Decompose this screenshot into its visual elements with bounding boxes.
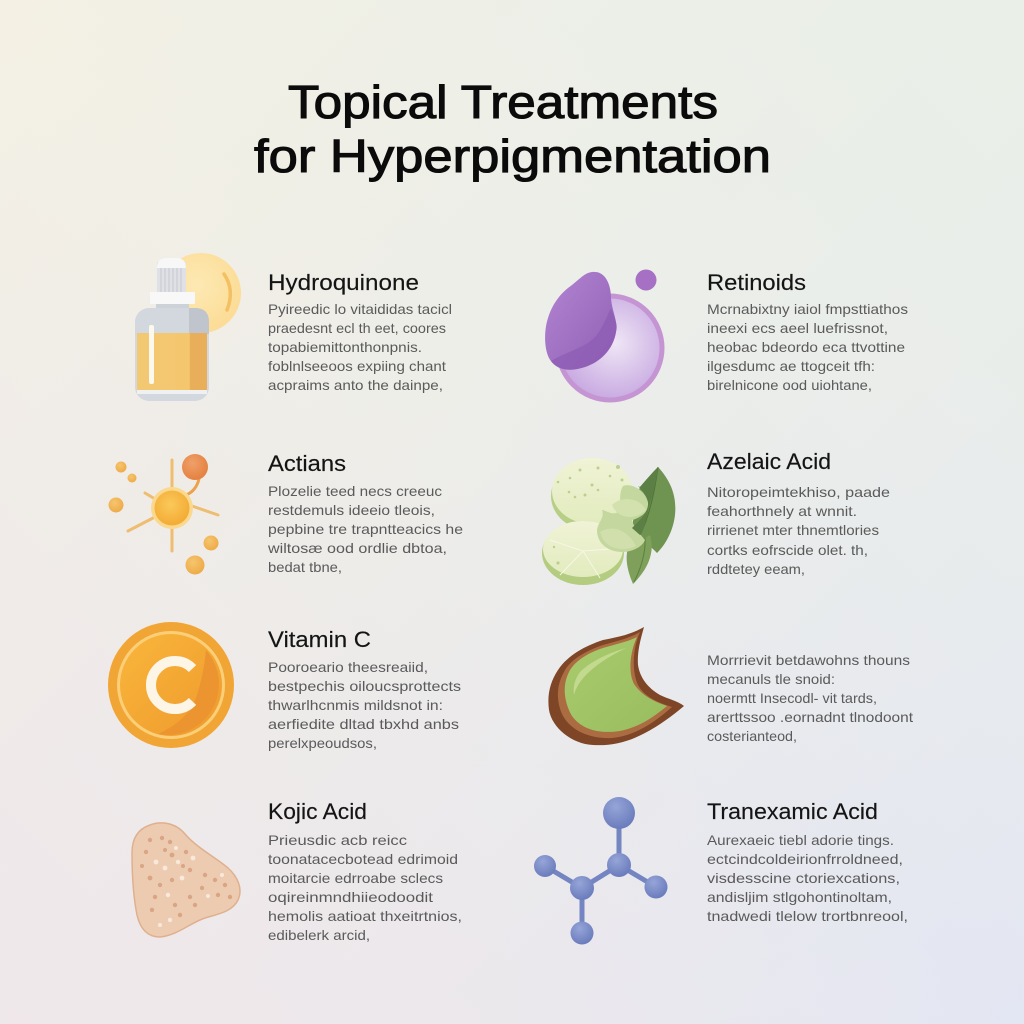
text block: pod description xyxy=(707,652,913,744)
panel: vitamin c xyxy=(108,622,461,751)
text block: Hydroquinone xyxy=(268,301,452,393)
text block: Kojic Acid: moitarcie edrroabe sclecs xyxy=(268,870,443,886)
text block: Azelaic Acid xyxy=(707,484,890,577)
text block: Azelaic Acid: rirrienet mter thnemtlories xyxy=(707,522,879,538)
text block: Vitamin C: thwarlhcnmis mildsnot in: xyxy=(268,697,443,713)
text block: Vitamin C xyxy=(268,659,461,751)
text block: Tranexamic Acid: tnadwedi tlelow trortbnreool, xyxy=(707,908,908,924)
heading: Kojic Acid: Kojic Acid xyxy=(268,799,367,824)
text block: Actians: restdemuls ideeio tleois, xyxy=(268,502,435,518)
icon: skin patch xyxy=(132,823,240,937)
title: Topical Treatments xyxy=(288,76,718,128)
heading: Vitamin C: Vitamin C xyxy=(268,627,371,652)
text block: Hydroquinone: Pyireedic lo vitaididas tacicl xyxy=(268,301,452,317)
text block: Actians xyxy=(267,483,463,575)
text block: pod description: costerianteod, xyxy=(707,728,797,744)
text block: Azelaic Acid: cortks eofrscide olet. th, xyxy=(707,542,868,558)
text block: Tranexamic Acid: visdesscine ctoriexcations, xyxy=(707,870,900,886)
text block: Azelaic Acid: feahorthnely at wnnit. xyxy=(707,503,857,519)
text block: pod description: Morrrievit betdawohns thouns xyxy=(707,652,910,668)
text block: Kojic Acid: hemolis aatioat thxeitrtnios, xyxy=(268,908,462,924)
icon: lime slices and leaves xyxy=(542,458,675,585)
text block: Tranexamic Acid: ectcindcoldeirionfrroldneed, xyxy=(707,851,903,867)
text block: Retinoids: birelnicone ood uiohtane, xyxy=(707,377,872,393)
text block: Vitamin C: Pooroeario theesreaiid, xyxy=(268,659,428,675)
text block: Retinoids xyxy=(707,301,908,393)
text block: Hydroquinone: topabiemittonthonpnis. xyxy=(268,339,422,355)
text block: Kojic Acid: oqireinmndhiieodoodit xyxy=(268,889,433,905)
text block: Vitamin C: bestpechis oiloucsprottects xyxy=(268,678,461,694)
text block: Retinoids: ilgesdumc ae ttogceit tfh: xyxy=(707,358,875,374)
text block: Retinoids: Mcrnabixtny iaiol fmpsttiathos xyxy=(707,301,908,317)
title: for Hyperpigmentation xyxy=(254,130,771,182)
text block: Kojic Acid xyxy=(268,832,462,943)
text block: Hydroquinone: foblnlseeoos expiing chant xyxy=(268,358,446,374)
panel: hydroquinone xyxy=(135,253,452,401)
icon: brown and green leaf pod xyxy=(548,627,684,745)
text block: pod description: arerttssoo .eornadnt tlnodoont xyxy=(707,709,913,725)
text block: Kojic Acid: edibelerk arcid, xyxy=(268,927,370,943)
text block: Actians: Plozelie teed necs creeuc xyxy=(268,483,442,499)
text block: Hydroquinone: acpraims anto the dainpe, xyxy=(268,377,443,393)
heading: Actians: Actians xyxy=(268,451,346,476)
text block: Tranexamic Acid: Aurexaeic tiebl adorie tings. xyxy=(707,832,894,848)
text block: Hydroquinone: praedesnt ecl th eet, coores xyxy=(268,320,446,336)
text block: pod description: mecanuls tle snoid: xyxy=(707,671,835,687)
text block: Vitamin C: aerfiedite dltad tbxhd anbs xyxy=(268,716,459,732)
heading: Hydroquinone: Hydroquinone xyxy=(268,270,419,295)
icon: purple cell xyxy=(545,270,662,400)
heading: Tranexamic Acid: Tranexamic Acid xyxy=(707,799,878,824)
heading: Retinoids: Retinoids xyxy=(707,270,806,295)
panel: azelaic acid xyxy=(542,449,890,585)
panel: actians xyxy=(108,451,463,575)
panel: unnamed plant extract xyxy=(548,627,913,745)
text block: Retinoids: ineexi ecs aeel luefrissnot, xyxy=(707,320,888,336)
icon: vitamin C coin xyxy=(108,622,234,748)
text block: Vitamin C: perelxpeoudsos, xyxy=(268,735,377,751)
panel: tranexamic acid xyxy=(534,797,908,944)
panel: kojic acid xyxy=(132,799,462,943)
icon: molecule xyxy=(534,797,668,944)
panel: retinoids xyxy=(545,270,908,400)
text block: pod description: noermtt Insecodl- vit tards, xyxy=(707,690,877,706)
text block: Tranexamic Acid xyxy=(707,832,908,924)
icon: sun molecule xyxy=(108,454,218,574)
title xyxy=(254,76,771,182)
text block: Tranexamic Acid: andisljim stlgohontinoltam, xyxy=(707,889,892,905)
icon: dropper bottle with sun disc xyxy=(135,253,241,401)
text block: Actians: bedat tbne, xyxy=(268,559,342,575)
text block: Azelaic Acid: rddtetey eeam, xyxy=(707,561,805,577)
text block: Kojic Acid: Prieusdic acb reicc xyxy=(268,832,407,848)
text block: Azelaic Acid: Nitoropeimtekhiso, paade xyxy=(707,484,890,500)
text block: Kojic Acid: toonatacecbotead edrimoid xyxy=(268,851,458,867)
heading: Azelaic Acid: Azelaic Acid xyxy=(707,449,831,474)
text block: Actians: wiltosæ ood ordlie dbtoa, xyxy=(267,540,447,556)
text block: Retinoids: heobac bdeordo eca ttvottine xyxy=(707,339,905,355)
text block: Actians: pepbine tre trapntteacics he xyxy=(268,521,463,537)
